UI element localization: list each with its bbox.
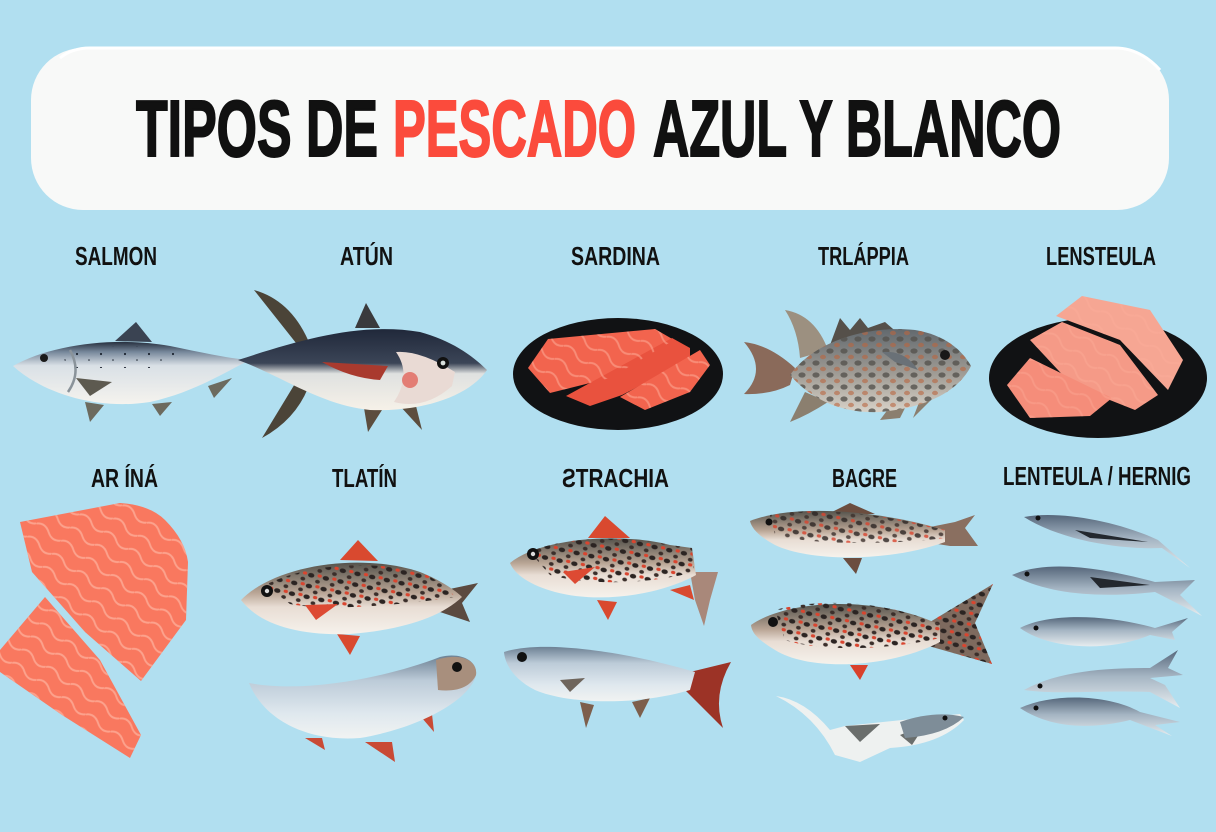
- illustration: bagre middle: [751, 584, 993, 680]
- label: bagre: BAGRE: [832, 463, 897, 493]
- label: sardina: SARDINA: [571, 241, 660, 271]
- illustration: trachia trout: [510, 516, 718, 626]
- illustration: salmon: [13, 322, 250, 422]
- illustration: bagre top: [750, 503, 978, 574]
- label: salmon: SALMON: [75, 241, 157, 271]
- label: tilapia: TRLÁPPIA: [818, 241, 909, 271]
- illustration: trachia sardine: [504, 647, 731, 728]
- label: lensteula: LENSTEULA: [1046, 241, 1156, 271]
- illustration: lensteula plate: [989, 296, 1207, 438]
- illustration: herring group: [1012, 515, 1202, 736]
- illustration: salmon fillets: [0, 503, 188, 758]
- title banner: TIPOS DE: [136, 84, 378, 173]
- illustration: tilapia: [744, 310, 971, 422]
- title banner: PESCADO: [393, 84, 636, 173]
- label: atún: ATÚN: [340, 241, 393, 271]
- label: tlatín: TLATÍN: [332, 463, 397, 493]
- illustration: tuna: [238, 290, 487, 438]
- label: trachia: ƧTRACHIA: [562, 463, 669, 493]
- illustration: lower tlatín fish: [249, 656, 476, 762]
- title banner: [31, 48, 1169, 210]
- illustration: bagre lower: [776, 696, 964, 762]
- illustration: sardina plate: [513, 318, 723, 430]
- label: ar iná: AR ÍNÁ: [91, 463, 158, 493]
- illustration: tlatín trout: [241, 540, 478, 655]
